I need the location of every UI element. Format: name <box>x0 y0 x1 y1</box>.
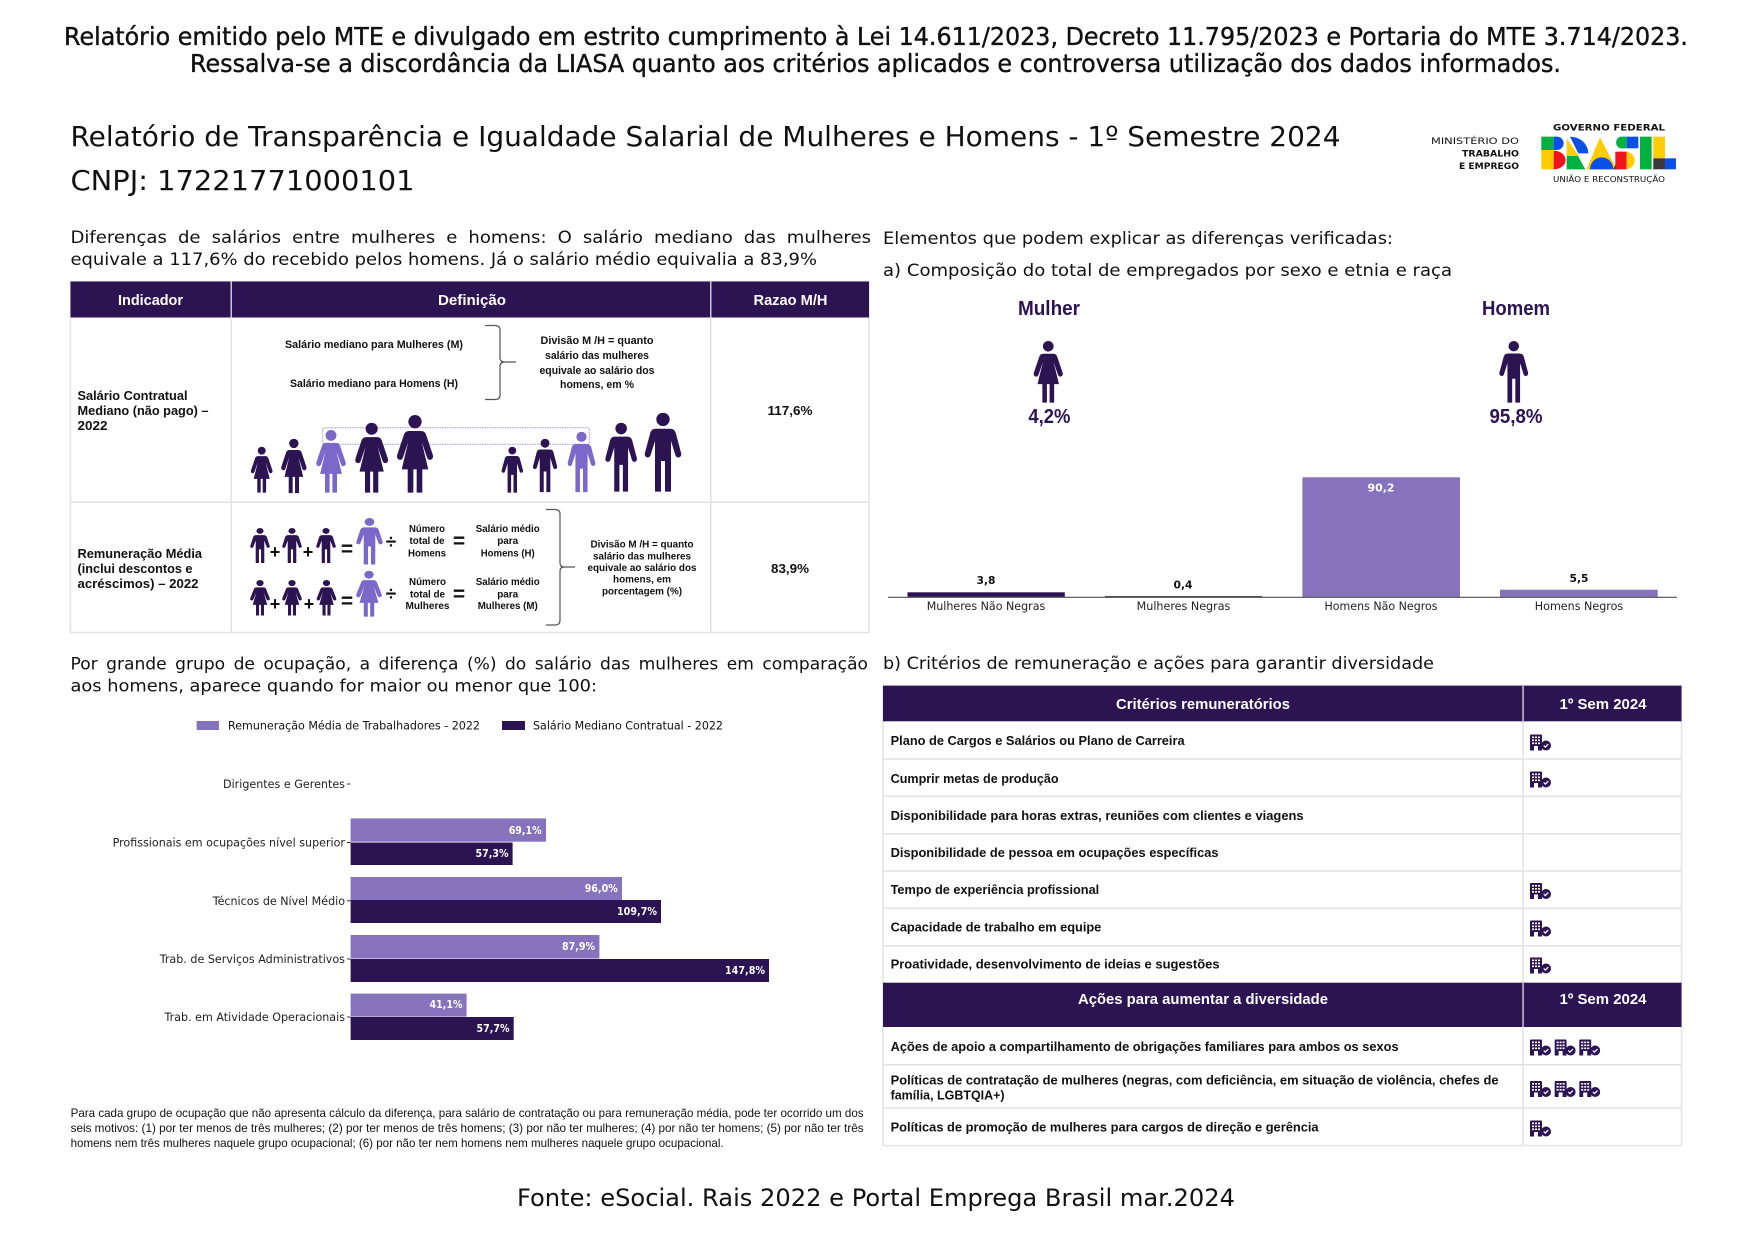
equation: women average: = <box>453 583 465 606</box>
legal notice heading: Ressalva-se a discordância da LIASA quanto aos critérios aplicados e controversa utilização dos dados informados. <box>190 49 1561 78</box>
bar values: 3,8 <box>976 575 996 587</box>
equation: men average: = <box>341 538 353 561</box>
subheading b: b) Critérios de remuneração e ações para garantir diversidade <box>883 654 1434 674</box>
bar values: 87,9% <box>562 941 595 953</box>
bar values: 96,0% <box>585 883 618 895</box>
median definition labels: Salário mediano para Mulheres (M) <box>285 339 463 351</box>
equation: women average: para <box>497 590 519 600</box>
median highlight box <box>323 428 589 444</box>
category labels: Profissionais em ocupações nível superior <box>113 836 345 850</box>
equation: men average: Número <box>409 524 445 535</box>
footnote: homens nem três mulheres naquele grupo ocupacional; (6) por não ter nem homens nem mulheres naquele grupo ocupacional. <box>71 1136 724 1150</box>
median definition labels <box>285 339 463 390</box>
equation: women average: Mulheres (M) <box>478 601 538 612</box>
median definition labels: Salário mediano para Homens (H) <box>290 378 458 390</box>
text block: salary differences intro: equivale a 117,6% do recebido pelos homens. Já o salário médio equivalia a 83,9% <box>70 250 817 270</box>
row label: remuneração média: (inclui descontos e <box>78 561 192 576</box>
logo: ministry and federal government: GOVERNO FEDERAL <box>1553 124 1665 134</box>
text block: occupation intro: Por grande grupo de ocupação, a diferença (%) do salário das mulheres em comparação <box>70 654 868 674</box>
equation: women average: ÷ <box>386 584 396 605</box>
median division note <box>540 335 654 391</box>
stat: women: 4,2% <box>1028 406 1071 428</box>
row label: salário contratual mediano: 2022 <box>78 418 108 433</box>
company id: CNPJ: 17221771000101 <box>70 164 414 197</box>
icon group: men sorted by salary <box>502 413 681 493</box>
average division note: porcentagem (%) <box>602 586 682 598</box>
bar values: 41,1% <box>430 999 463 1011</box>
average remuneration bars <box>351 818 622 1017</box>
logo: ministry and federal government <box>1431 124 1676 184</box>
category labels: Trab. de Serviços Administrativos <box>159 952 345 966</box>
equation: women average: total de <box>410 590 445 600</box>
category labels: Dirigentes e Gerentes <box>223 777 345 791</box>
diversity rows: Ações de apoio a compartilhamento de obrigações familiares para ambos os sexos <box>891 1040 1399 1054</box>
criteria check icons <box>1530 734 1551 974</box>
criteria rows: Cumprir metas de produção <box>891 772 1059 786</box>
icon group: women sorted by salary <box>251 415 433 493</box>
equation: men average <box>250 518 540 564</box>
equation: men average: para <box>497 536 519 547</box>
stat: women <box>1018 298 1080 428</box>
logo: ministry and federal government: MINISTÉRIO DO <box>1431 135 1519 147</box>
row label: salário contratual mediano: Mediano (não pago) – <box>78 403 208 418</box>
diversity header <box>883 983 1682 1027</box>
criteria rows: Tempo de experiência profissional <box>891 883 1099 897</box>
panel: indicator table <box>70 282 869 632</box>
table header <box>70 282 869 318</box>
bar values: 109,7% <box>617 906 657 918</box>
text block: salary differences intro: Diferenças de salários entre mulheres e homens: O salário mediano das mulheres <box>70 228 871 248</box>
row label: remuneração média: Remuneração Média <box>78 546 203 561</box>
equation: men average: Homens <box>408 548 446 560</box>
row label: salário contratual mediano: Salário Contratual <box>78 388 188 403</box>
average division note: equivale ao salário dos <box>588 563 697 574</box>
value: median ratio: 117,6% <box>768 403 813 418</box>
bar values: 57,3% <box>476 848 509 860</box>
bar values: 0,4 <box>1174 580 1192 592</box>
stat: women: Mulher <box>1018 298 1080 320</box>
stat: men: Homem <box>1482 298 1550 320</box>
equation: women average: + <box>270 594 280 614</box>
average bracket <box>546 510 575 625</box>
criteria rows: Disponibilidade de pessoa em ocupações específicas <box>891 846 1219 860</box>
bar values: 5,5 <box>1570 573 1588 585</box>
diversity header: Ações para aumentar a diversidade <box>1078 991 1328 1008</box>
stat: men: 95,8% <box>1490 406 1543 428</box>
equation: women average <box>250 571 540 617</box>
bar chart: salary difference by occupation <box>113 777 769 1040</box>
bar values <box>430 825 765 1035</box>
equation: men average: Salário médio <box>476 524 540 535</box>
table header: Razao M/H <box>754 292 828 309</box>
criteria header: Critérios remuneratórios <box>1116 696 1290 713</box>
row label: salário contratual mediano <box>78 388 208 433</box>
bar values: 57,7% <box>476 1023 510 1035</box>
average division note: salário das mulheres <box>593 552 691 562</box>
criteria rows: Disponibilidade para horas extras, reuniões com clientes e viagens <box>891 809 1304 823</box>
category labels: Mulheres Não Negras <box>927 599 1045 613</box>
equation: women average: Salário médio <box>476 577 540 588</box>
criteria header: 1º Sem 2024 <box>1560 696 1647 713</box>
median division note: homens, em % <box>560 379 634 391</box>
chart legend: Salário Mediano Contratual - 2022 <box>533 718 723 732</box>
category labels: Técnicos de Nível Médio <box>212 894 345 908</box>
criteria header <box>883 686 1682 721</box>
diversity rows: Políticas de contratação de mulheres (negras, com deficiência, em situação de violência, chefes de <box>891 1074 1499 1088</box>
category labels: Trab. em Atividade Operacionais <box>164 1010 345 1024</box>
footnote: Para cada grupo de ocupação que não apresenta cálculo da diferença, para salário de contratação ou para remuneração média, pode ter ocorrido um dos <box>71 1106 864 1120</box>
diversity check icons <box>1530 1040 1600 1136</box>
bar values: 69,1% <box>509 825 542 837</box>
median salary bars <box>351 842 769 1040</box>
logo: ministry and federal government: TRABALHO <box>1462 150 1519 160</box>
stat: men <box>1482 298 1550 428</box>
equation: men average: total de <box>410 536 445 547</box>
average division note: homens, em <box>613 574 671 586</box>
logo: ministry and federal government: UNIÃO E RECONSTRUÇÃO <box>1553 174 1665 184</box>
equation: women average: = <box>341 590 353 613</box>
bar values: 147,8% <box>725 965 765 977</box>
equation: men average: + <box>270 542 280 562</box>
median division note: salário das mulheres <box>545 350 649 362</box>
text block: occupation intro: aos homens, aparece quando for maior ou menor que 100: <box>70 676 597 696</box>
legal notice heading <box>64 22 1688 78</box>
category labels <box>113 777 345 1024</box>
category labels <box>927 599 1623 613</box>
equation: men average: ÷ <box>386 532 396 553</box>
average division note: Divisão M /H = quanto <box>590 540 694 550</box>
average division note <box>588 540 697 598</box>
equation: men average: = <box>453 530 465 553</box>
median division note: equivale ao salário dos <box>540 365 654 377</box>
text block: occupation intro <box>70 654 868 696</box>
diversity header: 1º Sem 2024 <box>1560 991 1647 1008</box>
diversity rows: Políticas de promoção de mulheres para cargos de direção e gerência <box>891 1120 1320 1134</box>
bar values <box>976 482 1588 592</box>
equation: men average: Homens (H) <box>481 548 535 560</box>
criteria rows: Plano de Cargos e Salários ou Plano de Carreira <box>891 734 1186 748</box>
row label: remuneração média <box>78 546 203 591</box>
logo: ministry and federal government: E EMPREGO <box>1459 162 1519 172</box>
chart legend: Remuneração Média de Trabalhadores - 2022 <box>228 718 480 732</box>
equation: men average: + <box>303 542 313 562</box>
category labels: Mulheres Negras <box>1137 599 1230 613</box>
source: Fonte: eSocial. Rais 2022 e Portal Emprega Brasil mar.2024 <box>517 1184 1235 1212</box>
text block: explanatory elements: Elementos que podem explicar as diferenças verificadas: <box>883 229 1393 249</box>
subheading a: a) Composição do total de empregados por sexo e etnia e raça <box>883 261 1452 281</box>
table header: Definição <box>438 292 506 309</box>
text block: salary differences intro <box>70 228 871 270</box>
row label: remuneração média: acréscimos) – 2022 <box>78 576 198 591</box>
criteria rows: Proatividade, desenvolvimento de ideias e sugestões <box>891 958 1220 972</box>
equation: women average: + <box>304 594 314 614</box>
equation: women average: Mulheres <box>406 601 450 612</box>
legal notice heading: Relatório emitido pelo MTE e divulgado em estrito cumprimento à Lei 14.611/2023, Decreto 11.795/2023 e Portaria do MTE 3.714/2023. <box>64 22 1688 51</box>
category labels: Homens Negros <box>1535 599 1623 613</box>
equation: women average: Número <box>409 577 446 588</box>
table header: Indicador <box>118 292 183 309</box>
title: Relatório de Transparência e Igualdade Salarial de Mulheres e Homens - 1º Semestre 2024 <box>70 120 1340 153</box>
bar values: 90,2 <box>1368 482 1394 494</box>
value: average ratio: 83,9% <box>771 561 809 576</box>
bar chart: workforce composition <box>888 477 1677 613</box>
footnote: seis motivos: (1) por ter menos de três mulheres; (2) por ter menos de três homens; (3) por não ter mulheres; (4) por não ter homens; (5) por não ter três <box>71 1121 864 1135</box>
diversity rows: família, LGBTQIA+) <box>891 1088 1005 1102</box>
chart legend <box>197 718 723 732</box>
category labels: Homens Não Negros <box>1324 599 1438 613</box>
criteria rows <box>891 734 1304 972</box>
footnote <box>71 1106 864 1150</box>
panel: criteria table <box>883 686 1682 1146</box>
median bracket <box>485 326 516 400</box>
diversity rows <box>891 1040 1499 1134</box>
criteria rows: Capacidade de trabalho em equipe <box>891 920 1101 934</box>
median division note: Divisão M /H = quanto <box>540 335 654 347</box>
